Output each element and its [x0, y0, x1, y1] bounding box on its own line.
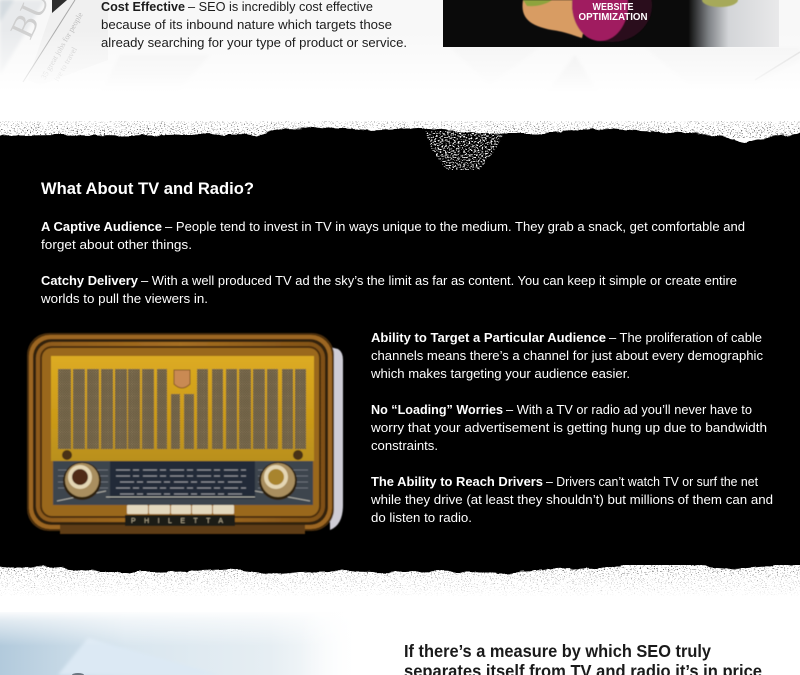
radio knob: right — [259, 462, 297, 500]
label: website optimization: WEBSITE — [592, 2, 634, 13]
text block: reach drivers — [370, 474, 773, 525]
radio buttons: PHILETTA — [131, 518, 223, 525]
text block: catchy delivery — [40, 273, 737, 306]
text block: cost effective — [101, 0, 407, 50]
text block: loading worries: worry that your advertisement is getting hung up due to bandwidth — [370, 420, 767, 435]
text block: captive audience — [41, 219, 745, 252]
text block: loading worries: No “Loading” Worries — [371, 402, 503, 417]
text block: loading worries: – With a TV or radio ad you’ll never have to — [506, 402, 752, 417]
text block: target audience: Ability to Target a Particular Audience — [371, 330, 606, 345]
text block: loading worries: constraints. — [371, 438, 438, 453]
text block: captive audience: A Captive Audience — [41, 219, 162, 234]
text block: target audience: – The proliferation of cable — [609, 330, 762, 345]
text block: target audience: which makes targeting your audience easier. — [370, 366, 630, 381]
radio knob: left — [63, 462, 101, 500]
text block: price heading: If there’s a measure by which SEO truly — [404, 641, 711, 661]
torn top edge — [0, 121, 800, 240]
text block: target audience: channels means there’s a channel for just about every demographic — [371, 348, 763, 363]
label: website optimization: OPTIMIZATION — [578, 12, 648, 23]
newspaper background: 35 great jobs for people — [39, 10, 85, 81]
text block: captive audience: – People tend to invest in TV in ways unique to the medium. They grab a snack, get comfortable and — [165, 219, 745, 234]
radio buttons — [125, 505, 235, 526]
radio grille — [51, 356, 314, 461]
text block: reach drivers: – Drivers can’t watch TV or surf the net — [546, 474, 758, 489]
text block: reach drivers: The Ability to Reach Drivers — [371, 474, 543, 489]
text block: catchy delivery: – With a well produced TV ad the sky’s the limit as far as content. You can keep it simple or create entire — [141, 273, 737, 288]
image: blue tablet photo — [0, 610, 360, 675]
icon: dark triangle on newspaper — [52, 0, 67, 13]
text block: reach drivers: while they drive (at least they shouldn’t) but millions of them can and — [370, 492, 773, 507]
heading: What About TV and Radio? — [41, 179, 254, 198]
label: website optimization — [578, 2, 648, 23]
photo: website optimization — [443, 0, 779, 47]
text block: captive audience: forget about other things. — [41, 237, 192, 252]
radio dial panel — [53, 461, 313, 505]
text block: cost effective: because of its inbound nature which targets those — [101, 17, 392, 32]
text block: catchy delivery: worlds to pull the viewers in. — [40, 291, 208, 306]
panel: TV and radio — [0, 121, 800, 596]
torn bottom edge — [0, 540, 800, 596]
text block: loading worries — [370, 402, 767, 453]
text block: catchy delivery: Catchy Delivery — [41, 273, 139, 288]
text block: price heading — [404, 641, 762, 675]
newspaper background — [0, 0, 800, 125]
image: vintage radio — [27, 333, 343, 534]
text block: target audience — [370, 330, 763, 381]
text block: reach drivers: do listen to radio. — [371, 510, 472, 525]
text block: cost effective: already searching for your type of product or service. — [101, 35, 407, 50]
radio emblem — [174, 370, 190, 388]
newspaper background: ive to travel — [52, 45, 79, 83]
